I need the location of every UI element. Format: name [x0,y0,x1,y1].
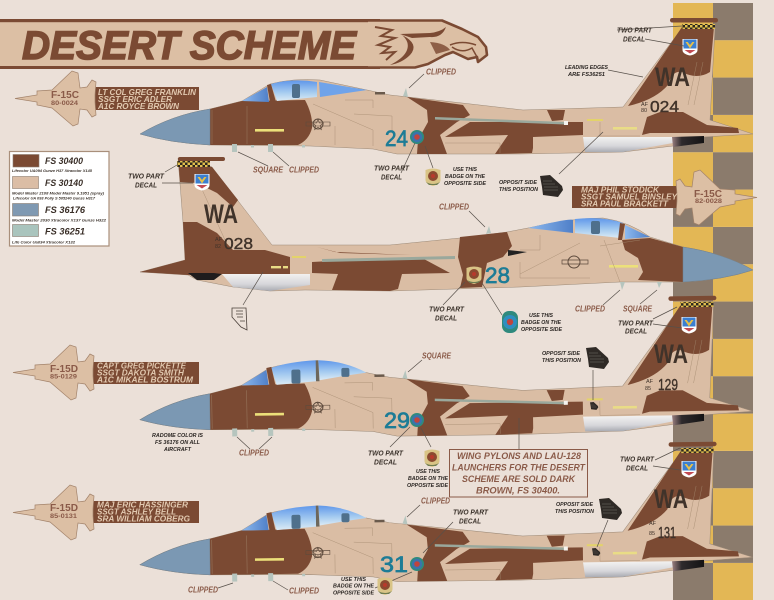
jet icon with crew plate: F-15D 85-0131: SSGT ASHLEY BELL [97,508,176,516]
label: square, aircraft 2 bottom: SQUARE [623,304,653,314]
label: clipped, aircraft 1 top: CLIPPED [426,68,456,76]
legend: FS colours: Model Master 2030 Xtracolor X137 Gunze H322 [12,218,107,222]
label: two part decal, fin 4: DECAL [626,464,648,472]
label: clipped, aircraft 4 left: CLIPPED [188,586,218,594]
label: two part decal, aircraft 4 [453,508,489,526]
legend: FS colours: FS 36176 [45,205,86,216]
label: two part decal, aircraft 2: DECAL [435,314,457,322]
label: use this badge, aircraft 1: USE THIS [453,167,477,173]
label: opposite side position, aircraft 4 [555,502,595,515]
leader lines and arrows [162,26,684,590]
jet icon with crew plate: F-15D 85-0129 [13,345,199,400]
aircraft 1: F-15C 80-0024: AF [641,102,649,108]
label: square, aircraft 3: SQUARE [422,352,452,360]
jet icon with crew plate: F-15C 80-0024: LT COL GREG FRANKLIN [98,88,196,97]
label: opposite side position, aircraft 1 [499,180,539,193]
callout: wing pylons: BROWN, FS 30400. [476,486,560,496]
title banner [0,19,380,69]
label: two part decal, fin 2 [128,172,165,190]
jet icon with crew plate: F-15D 85-0129: A1C MIKAEL BOSTRUM [96,376,194,384]
callout: wing pylons: LAUNCHERS FOR THE DESERT [452,462,586,472]
callout: wing pylons: WING PYLONS AND LAU-128 [457,451,581,461]
legend: FS colours: FS 30400 [45,156,84,167]
jet icon with crew plate: F-15C 82-0028: 82-0028 [695,199,723,205]
label: radome colour: FS 36176 ON ALL [155,440,200,446]
label: two part decal, aircraft 2: TWO PART [429,304,465,314]
label: two part decal, fin 3: TWO PART [618,318,654,328]
label: two part decal, fin 3 [618,318,654,336]
label: clipped, aircraft 2 top: CLIPPED [439,202,469,212]
jet icon with crew plate: F-15D 85-0131: F-15D [50,503,78,514]
jet icon with crew plate: F-15D 85-0131: MAJ ERIC HASSINGER [97,500,188,510]
label: use this badge, aircraft 3: USE THIS [416,469,440,475]
aircraft 1: F-15C 80-0024: 024 [650,99,679,116]
aircraft 3: F-15D 85-0129: 29 [384,408,410,433]
label: leading edges: ARE FS36251 [567,72,605,78]
jet icon with crew plate: F-15D 85-0129: CAPT GREG PICKETTE [97,362,187,370]
aircraft 3: F-15D 85-0129 [138,295,753,440]
label: radome colour [152,433,203,453]
icon: Georgia map, aircraft 1 [540,175,563,197]
label: two part decal, fin 2: DECAL [135,180,157,190]
label: opposite side position, aircraft 1: OPPOSIT SIDE [499,180,538,186]
aircraft 4: F-15D 85-0131: AF [649,521,657,527]
aircraft 1: F-15C 80-0024: 80 [641,108,647,114]
label: square clipped, aircraft 1: CLIPPED [289,166,319,174]
label: two part decal, aircraft 4: DECAL [459,516,481,526]
aircraft 3: F-15D 85-0129: AF [646,379,654,385]
label: use this badge, aircraft 1: OPPOSITE SIDE [444,181,487,187]
legend: FS colours: Model Master 2108 Model Master 9.1951 (spray) [12,192,105,196]
aircraft 2: F-15C 82-0028 [140,157,753,291]
label: two part decal, aircraft 3: TWO PART [368,448,404,458]
jet icon with crew plate: F-15C 80-0024: 80-0024 [51,101,79,107]
checker band background [673,3,753,600]
label: two part decal, aircraft 2 [429,304,465,322]
aircraft 1: F-15C 80-0024: WA [655,62,690,92]
label: two part decal, aircraft 1: DECAL [381,172,402,182]
jet icon with crew plate: F-15D 85-0129: 85-0129 [50,374,78,380]
label: square clipped, aircraft 1 [253,166,319,174]
legend: FS colours: FS 30140 [45,178,84,189]
legend: FS colours [10,152,109,246]
aircraft 4: F-15D 85-0131 [139,441,753,585]
heading: DESERT SCHEME [22,24,357,68]
jet icon with crew plate: F-15D 85-0131: 85-0131 [50,514,78,520]
label: two part decal, fin 1: TWO PART [617,26,653,34]
jet icon with crew plate: F-15D 85-0129: F-15D [50,364,78,375]
jet icon with crew plate: F-15D 85-0129: SSGT DAKOTA SMITH [97,368,184,378]
aircraft 1: F-15C 80-0024 [140,18,753,154]
label: use this badge, aircraft 3: BADGE ON THE [408,476,449,482]
label: two part decal, fin 2: TWO PART [128,172,165,180]
aircraft 4: F-15D 85-0131: 85 [649,531,655,537]
label: use this badge, aircraft 4: OPPOSITE SIDE [333,590,375,596]
aircraft 2: F-15C 82-0028: AF [215,237,223,243]
aircraft 3: F-15D 85-0129: WA [654,339,688,369]
label: use this badge, aircraft 2: OPPOSITE SIDE [521,327,563,333]
icon: blue badge, aircraft 2 [502,311,518,333]
aircraft 1: F-15C 80-0024: 24 [385,126,408,151]
jet icon with crew plate: F-15C 80-0024: SSGT ERIC ADLER [98,95,172,104]
aircraft 3: F-15D 85-0129: 85 [645,386,651,392]
label: two part decal, aircraft 1 [374,164,410,182]
jet icon with crew plate: F-15D 85-0131: SRA WILLIAM COBERG [97,514,190,524]
icon: squadron badge, aircraft 4 [378,578,392,595]
label: clipped, aircraft 4 top: CLIPPED [421,496,450,506]
label: use this badge, aircraft 4 [333,577,375,596]
label: use this badge, aircraft 3: OPPOSITE SIDE [407,483,449,489]
label: square clipped, aircraft 1: SQUARE [253,166,284,174]
jet icon with crew plate: F-15D 85-0131 [13,485,199,540]
legend: FS colours: Lifecolor UA094 Gunze H37 Xtracolor X145 [12,169,93,173]
label: leading edges: LEADING EDGES [565,65,608,71]
callout: wing pylons [450,450,588,497]
label: clipped, aircraft 3: CLIPPED [239,448,269,458]
jet icon with crew plate: F-15C 82-0028 [572,170,757,225]
icon: Nevada map [232,308,247,330]
label: radome colour: RADOME COLOR IS [152,433,203,439]
label: two part decal, fin 4 [620,454,655,472]
label: two part decal, fin 1: DECAL [623,34,645,44]
label: opposite side position, aircraft 3: THIS POSITION [542,358,582,364]
aircraft 4: F-15D 85-0131: WA [654,484,688,514]
icon: squadron badge, aircraft 1 [426,168,440,186]
legend: FS colours: Life Color Ua034 Xtracolor X132 [12,240,76,244]
legend: FS colours: FS 36251 [45,226,85,238]
aircraft 4: F-15D 85-0131: 131 [658,525,676,542]
label: opposite side position, aircraft 4: THIS POSITION [555,509,595,515]
label: two part decal, fin 4: TWO PART [620,454,655,464]
jet icon with crew plate: F-15C 80-0024: F-15C [51,90,79,101]
label: use this badge, aircraft 1: BADGE ON THE [445,174,486,180]
icon: Georgia map, aircraft 3 [586,347,609,369]
label: opposite side position, aircraft 4: OPPOSIT SIDE [556,502,594,508]
aircraft 4: F-15D 85-0131: 31 [380,552,408,577]
label: leading edges [565,65,608,78]
callout: wing pylons: SCHEME ARE SOLD DARK [462,474,576,484]
label: use this badge, aircraft 2: BADGE ON THE [521,320,562,326]
label: opposite side position, aircraft 3: OPPOSIT SIDE [542,351,581,357]
label: two part decal, aircraft 3: DECAL [374,458,397,466]
aircraft 2: F-15C 82-0028: WA [204,199,238,229]
aircraft 2: F-15C 82-0028: 028 [224,236,253,253]
jet icon with crew plate: F-15C 80-0024 [15,71,199,126]
icon: Georgia map, aircraft 4 [599,498,622,520]
label: use this badge, aircraft 2: USE THIS [529,313,553,319]
aircraft 2: F-15C 82-0028: 28 [485,263,510,288]
label: use this badge, aircraft 1 [444,167,487,187]
label: opposite side position, aircraft 3 [542,351,582,364]
label: use this badge, aircraft 4: USE THIS [341,577,366,583]
label: two part decal, aircraft 3 [368,448,404,466]
aircraft 2: F-15C 82-0028: 82 [215,244,221,250]
label: two part decal, aircraft 4: TWO PART [453,508,489,516]
aircraft 3: F-15D 85-0129: 129 [658,377,678,394]
legend: FS colours: Lifecolor UA 093 Polly S 505240 Gunze H317 [13,196,96,200]
label: two part decal, aircraft 1: TWO PART [374,164,410,172]
jet icon with crew plate: F-15C 82-0028: SRA PAUL BRACKETT [581,200,669,208]
label: use this badge, aircraft 2 [521,313,563,333]
label: two part decal, fin 1 [617,26,653,44]
jet icon with crew plate: F-15C 82-0028: SSGT SAMUEL BINSLEY [581,192,678,202]
label: radome colour: AIRCRAFT [163,447,191,453]
jet icon with crew plate: F-15C 82-0028: F-15C [694,189,722,200]
jet icon with crew plate: F-15C 80-0024: A1C ROYCE BROWN [97,102,179,111]
label: opposite side position, aircraft 1: THIS POSITION [499,187,539,193]
label: use this badge, aircraft 3 [407,469,449,489]
label: clipped, aircraft 4 right: CLIPPED [289,586,319,596]
label: clipped, aircraft 2 bottom: CLIPPED [575,304,605,314]
jet icon with crew plate: F-15C 82-0028: MAJ PHIL STODICK [581,186,660,194]
label: two part decal, fin 3: DECAL [625,326,647,336]
icon: squadron badge, aircraft 3 [424,450,440,467]
label: use this badge, aircraft 4: BADGE ON THE [333,584,375,590]
icon: eagle head [368,20,487,68]
